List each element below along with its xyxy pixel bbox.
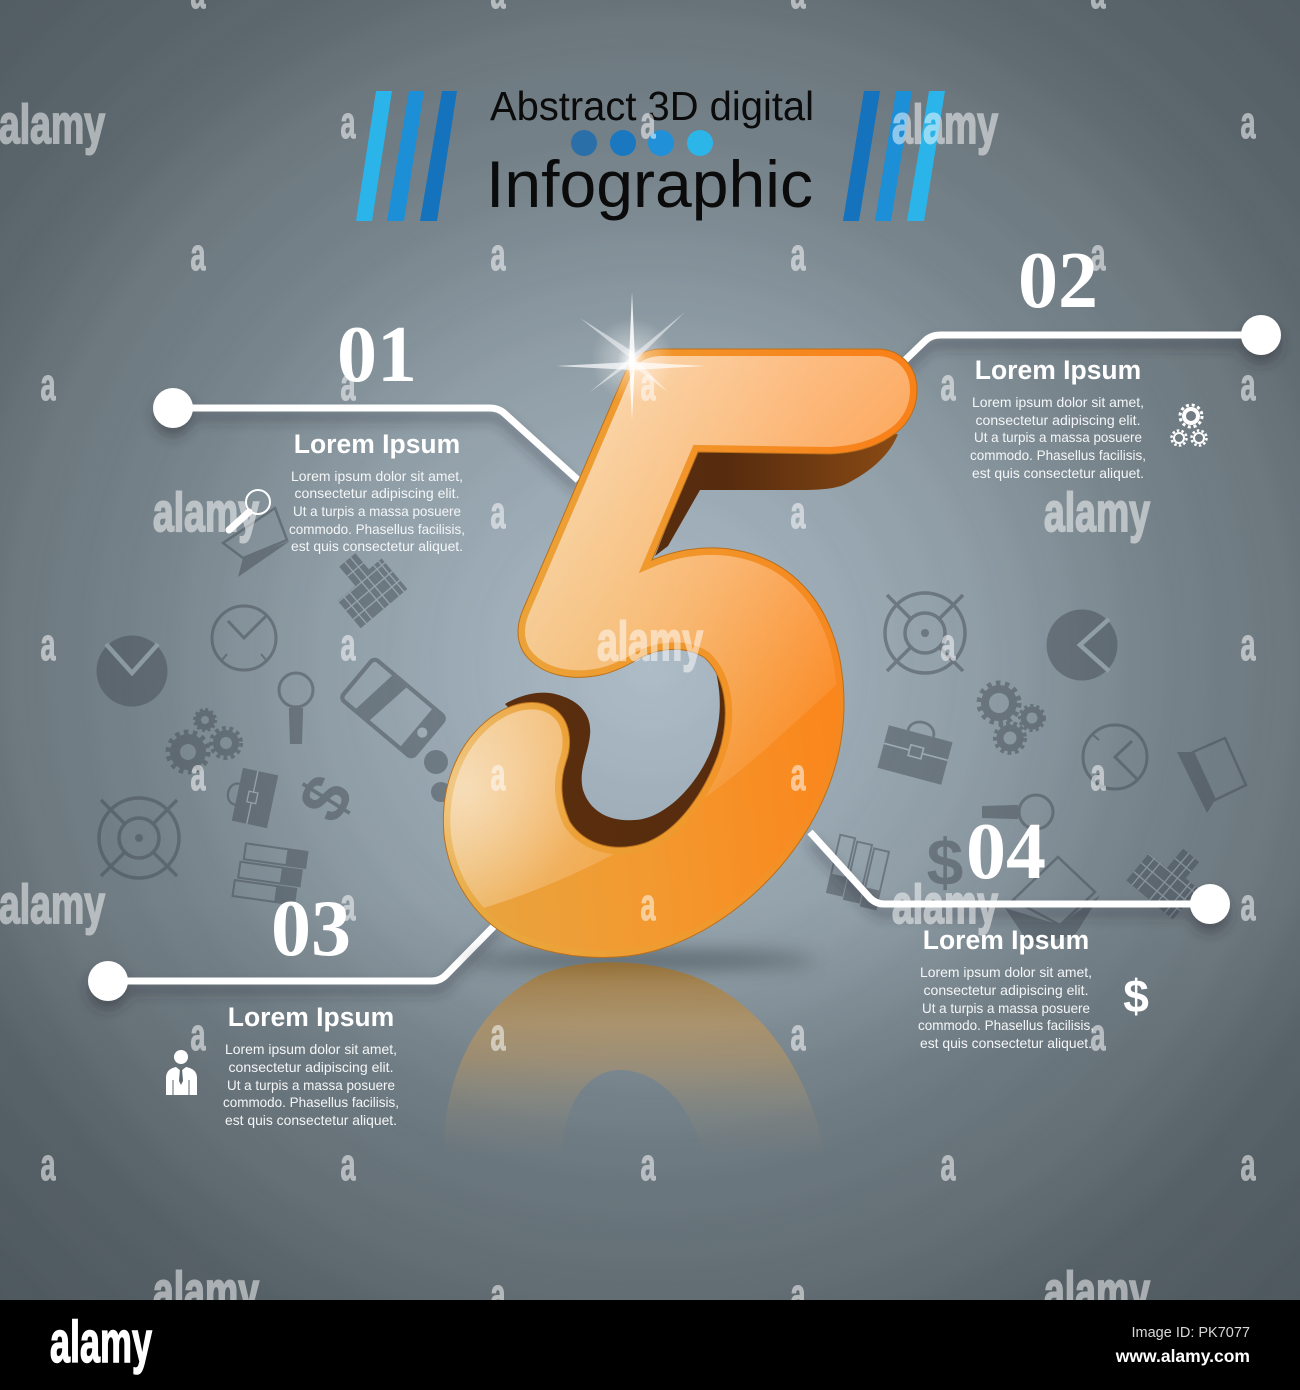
icon: buildings left [322,542,407,628]
body text 03: Lorem ipsum dolor sit amet, [225,1041,397,1057]
body text 01: Ut a turpis a massa posuere [293,503,461,519]
body text 02 [970,394,1146,481]
watermarks: a [790,1269,806,1320]
watermarks: a [490,1269,506,1320]
watermarks: a [1240,1139,1256,1190]
body text 02: Lorem ipsum dolor sit amet, [972,394,1144,410]
icon: buildings right [1126,834,1212,920]
icon: white dollar: $ [1123,970,1149,1022]
watermarks: a [40,359,56,410]
connector line 02 [898,315,1281,367]
icon: white magnifier [229,490,270,530]
number 03: 03 [271,885,351,973]
watermarks: a [340,879,356,930]
watermarks: a [490,229,506,280]
watermarks: a [1240,879,1256,930]
icon: decorative dots [424,750,451,802]
watermarks: a [940,1139,956,1190]
footer image id: Image ID: PK7077 [1132,1325,1250,1341]
icon: magnifier right [982,795,1053,829]
icon: briefcase right [877,714,956,785]
watermarks: a [490,1009,506,1060]
footer strip [0,1300,1300,1390]
body text 02: consectetur adipiscing elit. [976,412,1140,428]
watermarks: a [1240,619,1256,670]
watermarks: a [490,487,506,538]
icon: gears right [979,683,1044,753]
number 01: 01 [337,311,417,399]
watermarks: a [40,1139,56,1190]
body text 02: Ut a turpis a massa posuere [974,429,1142,445]
title block [356,83,945,221]
big 3D number five [442,348,918,1034]
icon: binders right [826,835,890,909]
faded background icons [96,508,1246,945]
watermarks: a [640,359,656,410]
title line 2: Infographic [486,147,813,221]
watermarks: a [1090,229,1106,280]
body text 01: consectetur adipiscing elit. [294,485,460,501]
watermarks: alamy [892,873,998,935]
watermarks: a [640,1139,656,1190]
icon: binders left [233,843,307,905]
heading 01: Lorem Ipsum [294,429,460,459]
body text 01: Lorem ipsum dolor sit amet, [291,468,463,484]
body text 03: commodo. Phasellus facilisis, [223,1094,399,1110]
watermarks: alamy [153,1260,259,1322]
title stripes left [356,91,457,221]
watermarks: a [1240,97,1256,148]
body text 03: est quis consectetur aliquet. [225,1112,397,1128]
section 03 [223,885,399,1128]
body text 04 [918,964,1094,1051]
icon: laptop lower right [1005,857,1100,945]
body text 04: est quis consectetur aliquet. [920,1035,1092,1051]
section 04 [918,808,1094,1051]
watermarks: alamy [892,93,998,155]
icon: clock left [212,606,276,670]
body text 03 [223,1041,399,1128]
extrusion of top bar [655,434,898,556]
icon: clock right [1083,725,1147,789]
watermarks: a [940,619,956,670]
watermarks: alamy [1044,481,1150,543]
watermarks: a [790,487,806,538]
body text 03: Ut a turpis a massa posuere [227,1077,395,1093]
title dots [571,130,713,156]
watermarks: alamy [153,481,259,543]
icon: target left [99,798,179,878]
watermarks: a [340,97,356,148]
watermarks: a [640,97,656,148]
body text 04: Ut a turpis a massa posuere [922,1000,1090,1016]
connector line 01 [153,388,578,480]
number 04: 04 [966,808,1046,896]
body text 02: commodo. Phasellus facilisis, [970,447,1146,463]
body text 01: commodo. Phasellus facilisis, [289,521,465,537]
icon: phone [340,658,446,758]
icon: white gears [1172,405,1206,446]
watermarks: a [490,749,506,800]
watermarks: alamy [597,610,703,672]
watermarks: a [790,1009,806,1060]
icon: briefcase left [223,766,278,828]
watermarks: alamy [1044,1260,1150,1322]
title stripes right [843,91,945,221]
icon: gears left [168,710,241,772]
body text 01: est quis consectetur aliquet. [291,538,463,554]
section 01 [289,311,465,554]
watermarks: a [1090,1009,1106,1060]
watermarks: a [790,229,806,280]
watermarks: a [190,1009,206,1060]
icon: dollar left: $ [284,762,368,835]
watermarks: a [1090,749,1106,800]
title line 1: Abstract 3D digital [490,83,814,129]
watermarks: a [1240,359,1256,410]
watermarks: a [640,879,656,930]
body text 02: est quis consectetur aliquet. [972,465,1144,481]
sparkle on number [556,292,705,420]
icon: laptop right [1177,738,1246,813]
watermarks: a [340,1139,356,1190]
connector line 03 [88,920,500,1001]
floor shadow under number [465,950,815,970]
icon: white businessman [166,1050,197,1095]
watermarks: a [940,359,956,410]
icon: pie chart right [1046,610,1118,680]
watermarks: a [790,749,806,800]
watermarks: a [190,749,206,800]
heading 03: Lorem Ipsum [228,1002,394,1032]
watermarks: alamy [0,93,105,155]
extrusion of inner bowl [505,672,745,860]
heading 04: Lorem Ipsum [923,925,1089,955]
watermarks: a [340,619,356,670]
body text 03: consectetur adipiscing elit. [228,1059,394,1075]
body text 04: Lorem ipsum dolor sit amet, [920,964,1092,980]
section 02 [970,237,1146,481]
number outer edge [443,349,917,957]
body text 01 [289,468,465,554]
connector line 04 [810,832,1230,924]
reflection of number five [446,962,816,1123]
footer logo: alamy [50,1310,152,1375]
watermarks: a [190,229,206,280]
footer url: www.alamy.com [1115,1346,1250,1366]
body text 04: consectetur adipiscing elit. [924,982,1088,998]
watermarks: alamy [0,873,105,935]
heading 02: Lorem Ipsum [975,355,1141,385]
number 02: 02 [1018,237,1098,325]
watermarks: a [340,359,356,410]
icon: dollar right: $ [927,825,963,899]
icon: magnifier left [279,673,313,744]
icon: laptop left [223,508,290,577]
number face [444,350,916,957]
body text 04: commodo. Phasellus facilisis, [918,1017,1094,1033]
icon: pie chart left [96,636,168,706]
icon: target right [885,593,965,673]
watermarks: a [40,619,56,670]
